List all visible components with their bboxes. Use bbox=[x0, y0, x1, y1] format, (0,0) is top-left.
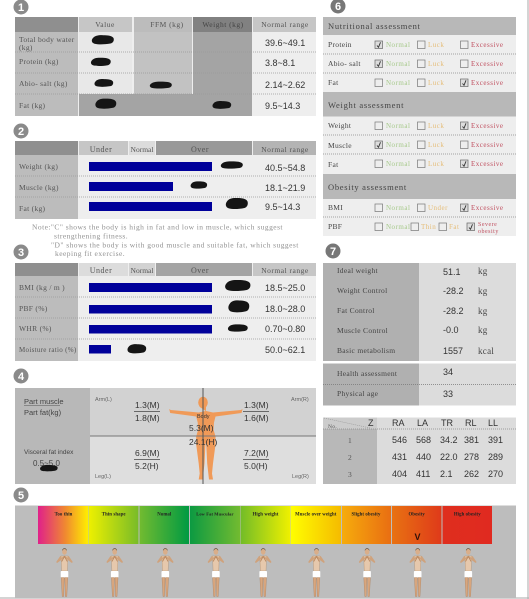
panel 6: assessment checklist: Weight assessment bbox=[328, 100, 404, 110]
colour scale: Low Fat Muscular bbox=[196, 512, 234, 516]
note text: strengthening fitness. bbox=[54, 232, 128, 240]
panel 6: assessment checklist: Luck bbox=[428, 41, 444, 49]
panel 6: assessment checklist: Luck bbox=[428, 79, 444, 87]
panel: impedance table: 404 bbox=[392, 469, 407, 479]
section 6 marker: 6 bbox=[335, 1, 341, 13]
panel 3: obesity analysis: BMI (kg / m ) bbox=[19, 283, 65, 292]
panel 7: control targets: Fat Control bbox=[337, 306, 375, 315]
panel 3: obesity analysis: 18.0~28.0 bbox=[265, 304, 305, 314]
panel 4: segmental analysis: 6.9(M) bbox=[135, 448, 160, 458]
panel 7: control targets: Ideal weight bbox=[337, 266, 378, 275]
panel: impedance table: 2.1 bbox=[440, 469, 453, 479]
panel: impedance table: 568 bbox=[416, 435, 431, 445]
panel 6: assessment checklist: Excessive bbox=[471, 122, 504, 130]
panel 6: assessment checklist: Severe bbox=[478, 222, 497, 228]
panel 6: assessment checklist: Normal bbox=[386, 204, 410, 212]
panel: impedance table: RL bbox=[465, 418, 477, 428]
note text: Note:"C" shows the body is high in fat and low in muscle, which suggest bbox=[32, 222, 283, 232]
panel 6: assessment checklist: Normal bbox=[386, 60, 410, 68]
panel 1: body composition table: 3.8~8.1 bbox=[265, 58, 295, 68]
panel 4: segmental analysis: Arm(L) bbox=[95, 397, 112, 403]
panel 6: assessment checklist: Normal bbox=[386, 41, 410, 49]
note text: keeping fit exercise. bbox=[55, 249, 125, 258]
panel 3: obesity analysis: Over bbox=[191, 266, 209, 275]
panel: impedance table: 22.0 bbox=[440, 452, 458, 462]
panel 3: obesity analysis: Normal range bbox=[261, 266, 309, 275]
panel: health assessment: 34 bbox=[443, 367, 453, 377]
panel 1: body composition table: 2.14~2.62 bbox=[265, 80, 305, 90]
section 1 marker: 1 bbox=[18, 2, 24, 14]
panel 4: segmental analysis: Leg(R) bbox=[292, 474, 309, 480]
panel 4: segmental analysis: 1.3(M) bbox=[135, 400, 160, 410]
panel 7: control targets: kg bbox=[478, 325, 488, 335]
panel 1: body composition table: Protein (kg) bbox=[19, 57, 59, 66]
panel 4: segmental analysis: 5.0(H) bbox=[244, 461, 268, 471]
panel 3: obesity analysis: Normal bbox=[131, 266, 153, 275]
panel 6: assessment checklist: BMI bbox=[328, 203, 343, 212]
panel 3: obesity analysis: Under bbox=[90, 266, 112, 275]
panel: impedance table: 278 bbox=[464, 452, 479, 462]
panel: impedance table: 431 bbox=[392, 452, 407, 462]
panel 1: body composition table: FFM (kg) bbox=[150, 20, 184, 29]
section 7 marker: 7 bbox=[330, 246, 336, 258]
panel 6: assessment checklist: Excessive bbox=[471, 204, 504, 212]
panel 4: segmental analysis: 1.3(M) bbox=[244, 400, 269, 410]
panel 2: muscle and fat analysis: Normal bbox=[131, 145, 153, 154]
panel 4: segmental analysis: 24.1(H) bbox=[189, 437, 218, 447]
section 5 marker: 5 bbox=[18, 490, 24, 502]
panel 1: body composition table: Abio- salt (kg) bbox=[19, 79, 68, 88]
note text: "D" shows the body is with good muscle and suitable fat, which suggest bbox=[51, 240, 299, 250]
panel: impedance table: 262 bbox=[464, 469, 479, 479]
panel 6: assessment checklist: Normal bbox=[386, 160, 410, 168]
panel 7: control targets: kg bbox=[478, 266, 488, 276]
panel 7: control targets: 1557 bbox=[443, 346, 463, 356]
colour scale: Nomal bbox=[157, 512, 172, 518]
panel 4: segmental analysis: 5.2(H) bbox=[135, 461, 159, 471]
panel 4: segmental analysis: 1.6(M) bbox=[244, 413, 269, 423]
section 4 marker: 4 bbox=[18, 371, 25, 383]
panel: impedance table: 440 bbox=[416, 452, 431, 462]
section 3 marker bbox=[14, 244, 28, 260]
panel 6: assessment checklist: Excessive bbox=[471, 160, 504, 168]
panel 3: obesity analysis: WHR (%) bbox=[19, 324, 52, 333]
panel 4: segmental analysis: 7.2(M) bbox=[244, 448, 269, 458]
panel 6: assessment checklist bbox=[323, 17, 516, 236]
panel: impedance table: 391 bbox=[488, 435, 503, 445]
panel 6: assessment checklist: Normal bbox=[386, 79, 410, 87]
panel 6: assessment checklist: Fat bbox=[328, 78, 339, 87]
panel: impedance table: 546 bbox=[392, 435, 407, 445]
panel 7: control targets: kg bbox=[478, 306, 488, 316]
panel 1: body composition table: Normal range bbox=[261, 20, 309, 29]
panel 6: assessment checklist: Excessive bbox=[471, 60, 504, 68]
panel 7: control targets: -28.2 bbox=[443, 306, 464, 316]
panel 4: segmental analysis: 0.5~5.0 bbox=[33, 459, 60, 468]
panel 6: assessment checklist: Abio- salt bbox=[328, 59, 361, 68]
section 2 marker bbox=[14, 124, 28, 138]
panel 3: obesity analysis: 18.5~25.0 bbox=[265, 283, 305, 293]
colour scale: Muscle over weight bbox=[295, 512, 337, 518]
panel 1: body composition table: Value bbox=[95, 20, 115, 29]
panel 2: muscle and fat analysis bbox=[15, 141, 316, 219]
panel: impedance table: 289 bbox=[488, 452, 503, 462]
panel 4: segmental analysis: Part fat(kg) bbox=[24, 408, 62, 417]
panel 2: muscle and fat analysis: Under bbox=[90, 145, 112, 154]
panel 2: muscle and fat analysis: Weight (kg) bbox=[19, 162, 58, 171]
panel 6: assessment checklist: Luck bbox=[428, 141, 444, 149]
panel: impedance table: Z bbox=[368, 418, 374, 428]
panel 3: obesity analysis bbox=[15, 263, 316, 361]
panel 7: control targets: Weight Control bbox=[337, 286, 387, 295]
section 2 marker: 2 bbox=[18, 126, 24, 138]
panel 6: assessment checklist: Luck bbox=[428, 60, 444, 68]
section 3 marker: 3 bbox=[18, 247, 24, 259]
panel 7: control targets: Basic metabolism bbox=[337, 346, 395, 355]
panel 4: segmental analysis: Visceral fat index bbox=[24, 449, 74, 456]
panel 7: control targets: kg bbox=[478, 286, 488, 296]
section 1 marker bbox=[14, 0, 28, 14]
panel 1: body composition table: Weight (kg) bbox=[202, 20, 244, 29]
panel 6: assessment checklist: Normal bbox=[386, 223, 410, 231]
panel 4: segmental analysis: 1.8(M) bbox=[135, 413, 160, 423]
panel 6: assessment checklist: Normal bbox=[386, 141, 410, 149]
panel 1: body composition table: Fat (kg) bbox=[19, 101, 46, 110]
panel 2: muscle and fat analysis: 18.1~21.9 bbox=[265, 183, 305, 193]
human body figure bbox=[169, 397, 242, 480]
panel 6: assessment checklist: obesity bbox=[478, 229, 499, 235]
panel: impedance table: 270 bbox=[488, 469, 503, 479]
panel 4: segmental analysis: Leg(L) bbox=[95, 474, 111, 480]
panel 6: assessment checklist: Protein bbox=[328, 40, 352, 49]
panel 6: assessment checklist: Fat bbox=[449, 223, 459, 231]
panel 7: control targets: kcal bbox=[478, 346, 494, 356]
panel: impedance table: 1 bbox=[348, 436, 352, 445]
panel 6: assessment checklist: Fat bbox=[328, 160, 339, 169]
section 7 marker bbox=[326, 244, 340, 258]
panel: health assessment: Health assessment bbox=[337, 369, 398, 378]
panel 5: body type scale bbox=[15, 506, 516, 598]
panel 2: muscle and fat analysis: Muscle (kg) bbox=[19, 183, 59, 192]
panel: impedance table: 34.2 bbox=[440, 435, 458, 445]
panel: impedance table: LL bbox=[488, 418, 498, 428]
panel: impedance table: 381 bbox=[464, 435, 479, 445]
panel 1: body composition table: (kg) bbox=[19, 43, 33, 52]
panel 4: segmental analysis: 5.3(M) bbox=[189, 423, 214, 433]
panel: impedance table: RA bbox=[392, 418, 405, 428]
panel: health assessment bbox=[323, 364, 516, 406]
panel 6: assessment checklist: Thin bbox=[421, 223, 436, 231]
panel 3: obesity analysis: 50.0~62.1 bbox=[265, 345, 305, 355]
panel: impedance table: 3 bbox=[348, 470, 352, 479]
panel 4: segmental analysis bbox=[15, 388, 316, 484]
colour scale bbox=[38, 506, 492, 544]
panel 4: segmental analysis: Arm(R) bbox=[291, 397, 309, 403]
panel: impedance table: No. bbox=[328, 424, 337, 430]
panel 2: muscle and fat analysis: 9.5~14.3 bbox=[265, 202, 300, 212]
panel 1: body composition table: Total body water bbox=[19, 35, 75, 44]
colour scale: Slight obesity bbox=[352, 512, 381, 518]
panel 6: assessment checklist: Excessive bbox=[471, 41, 504, 49]
panel 4: segmental analysis: Body bbox=[197, 414, 210, 420]
panel: impedance table: TR bbox=[441, 418, 453, 428]
colour scale: High obesity bbox=[454, 512, 481, 518]
section 4 marker bbox=[14, 368, 28, 384]
panel 3: obesity analysis: Moisture ratio (%) bbox=[19, 346, 77, 354]
panel 6: assessment checklist: PBF bbox=[328, 222, 342, 231]
panel 3: obesity analysis: 0.70~0.80 bbox=[265, 324, 305, 334]
colour scale: Too thin bbox=[55, 512, 73, 518]
panel: impedance table: 2 bbox=[348, 453, 352, 462]
panel: impedance table bbox=[323, 418, 516, 484]
panel 6: assessment checklist: Normal bbox=[386, 122, 410, 130]
colour scale: V bbox=[414, 532, 421, 542]
panel 7: control targets: -28.2 bbox=[443, 286, 464, 296]
panel: impedance table: 411 bbox=[416, 469, 430, 479]
panel 2: muscle and fat analysis: Over bbox=[191, 145, 209, 154]
panel 6: assessment checklist: Excessive bbox=[471, 141, 504, 149]
note text bbox=[32, 222, 299, 258]
panel 6: assessment checklist: Nutritional assessment bbox=[328, 21, 421, 31]
colour scale: High weight bbox=[252, 512, 279, 518]
panel: health assessment: Physical age bbox=[337, 389, 379, 398]
panel 6: assessment checklist: Under bbox=[428, 204, 448, 212]
panel 6: assessment checklist: Excessive bbox=[471, 79, 504, 87]
panel 6: assessment checklist: Luck bbox=[428, 122, 444, 130]
section 5 marker bbox=[14, 488, 28, 502]
colour scale: Thin shape bbox=[102, 512, 126, 518]
panel 1: body composition table: 39.6~49.1 bbox=[265, 38, 305, 48]
section 6 marker bbox=[330, 0, 346, 14]
panel 2: muscle and fat analysis: 40.5~54.8 bbox=[265, 163, 305, 173]
body figures bbox=[57, 548, 476, 596]
panel 2: muscle and fat analysis: Normal range bbox=[261, 145, 309, 154]
panel 1: body composition table bbox=[15, 17, 316, 116]
panel 7: control targets bbox=[323, 263, 516, 361]
panel 6: assessment checklist: Weight bbox=[328, 121, 352, 130]
panel: impedance table: LA bbox=[417, 418, 428, 428]
panel 7: control targets: -0.0 bbox=[443, 325, 459, 335]
panel 1: body composition table: 9.5~14.3 bbox=[265, 101, 300, 111]
panel 7: control targets: 51.1 bbox=[443, 267, 461, 277]
panel: health assessment: 33 bbox=[443, 389, 453, 399]
panel 6: assessment checklist: Obesity assessment bbox=[328, 182, 407, 192]
panel 4: segmental analysis: Part muscle bbox=[24, 397, 64, 406]
panel 7: control targets: Muscle Control bbox=[337, 326, 388, 335]
panel 3: obesity analysis: PBF (%) bbox=[19, 304, 48, 313]
panel 6: assessment checklist: Muscle bbox=[328, 141, 352, 150]
panel 2: muscle and fat analysis: Fat (kg) bbox=[19, 204, 46, 213]
colour scale: Obesity bbox=[408, 512, 425, 518]
panel 6: assessment checklist: Luck bbox=[428, 160, 444, 168]
